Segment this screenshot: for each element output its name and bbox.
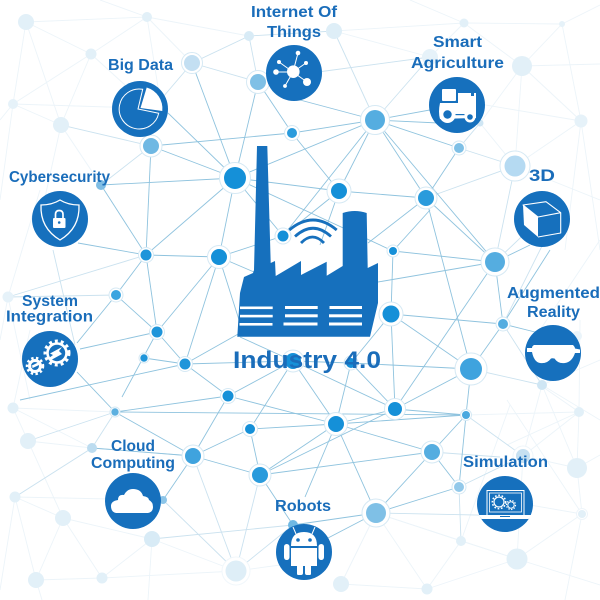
item: Robots <box>275 498 332 580</box>
item: Big Data <box>108 57 173 137</box>
item: Simulation <box>463 454 548 532</box>
icon: shield with padlock <box>32 191 88 247</box>
icon: gears <box>22 331 78 387</box>
label: Robots <box>275 498 331 515</box>
item: Cybersecurity <box>9 169 110 247</box>
icon: tractor <box>429 77 485 133</box>
label: Things <box>267 24 321 41</box>
item: 3D <box>514 166 570 247</box>
label <box>507 285 600 321</box>
icon: hub network <box>266 45 322 101</box>
network links: central <box>20 63 550 538</box>
label: Integration <box>6 308 93 326</box>
label: Big Data <box>108 57 173 74</box>
icon: laptop with gears <box>477 476 533 532</box>
icon: pie chart <box>112 81 168 137</box>
label: Smart <box>433 34 482 51</box>
item: Cloud Computing <box>91 438 175 529</box>
label <box>251 4 338 41</box>
icon: android robot <box>276 524 332 580</box>
label: Reality <box>527 304 580 321</box>
item: Augmented Reality <box>507 285 600 381</box>
icon: AR goggles <box>525 325 581 381</box>
icon: factory building <box>237 146 378 337</box>
label: 3D <box>529 166 555 185</box>
label: Internet Of <box>251 4 338 21</box>
item: System Integration <box>6 293 93 387</box>
label: Simulation <box>463 454 548 471</box>
label: Agriculture <box>411 55 504 72</box>
label <box>6 293 93 326</box>
label: Cloud <box>111 438 155 455</box>
item: Internet Of Things <box>251 4 338 101</box>
icon: cube <box>514 191 570 247</box>
main title: Industry 4.0 <box>233 347 381 374</box>
label <box>91 438 175 472</box>
network nodes: central <box>109 52 530 527</box>
icon: cloud <box>105 473 161 529</box>
label: Cybersecurity <box>9 169 110 186</box>
icon: wifi signal <box>289 220 337 243</box>
label <box>411 34 504 72</box>
label: Computing <box>91 455 175 472</box>
factory with wifi <box>237 146 378 337</box>
factory windows <box>240 306 362 326</box>
label: System <box>22 293 78 310</box>
item: Smart Agriculture <box>411 34 504 133</box>
label: Augmented <box>507 285 600 302</box>
